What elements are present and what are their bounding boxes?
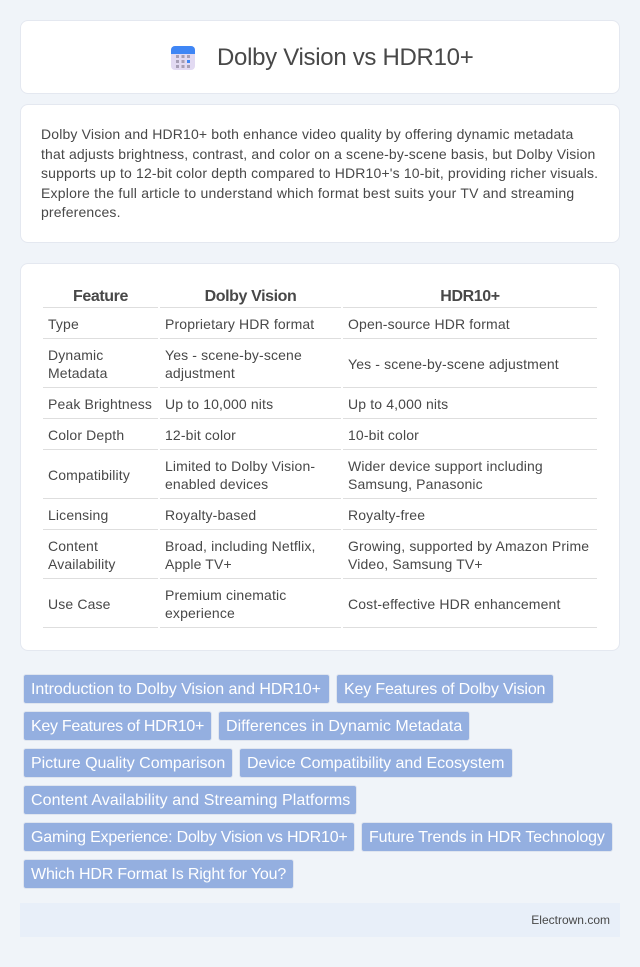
table rows: Yes - scene-by-scene adjustment bbox=[348, 356, 559, 372]
table rows: Availability bbox=[48, 556, 116, 572]
tag bbox=[23, 711, 212, 741]
title panel bbox=[20, 20, 620, 94]
intro text: that adjusts brightness, contrast, and color on a scene-by-scene basis, but Dolby Vision bbox=[41, 146, 595, 162]
tag: Key Features of Dolby Vision bbox=[344, 681, 545, 698]
table rows: Broad, including Netflix, bbox=[165, 538, 316, 554]
table rows: Royalty-free bbox=[348, 507, 425, 523]
tag: Picture Quality Comparison bbox=[31, 755, 225, 772]
table rows: Limited to Dolby Vision- bbox=[165, 458, 315, 474]
table header bbox=[73, 288, 500, 305]
tag: Content Availability and Streaming Platforms bbox=[31, 792, 350, 809]
table rows: Licensing bbox=[48, 507, 108, 523]
tag bbox=[23, 859, 294, 889]
intro text: Explore the full article to understand which format best suits your TV and streaming bbox=[41, 185, 574, 201]
topic tags bbox=[23, 674, 613, 889]
intro text: supports up to 12-bit color depth compared to HDR10+'s 10-bit, providing richer visuals. bbox=[41, 165, 598, 181]
table rows: Growing, supported by Amazon Prime bbox=[348, 538, 589, 554]
table rows bbox=[43, 307, 597, 628]
tag: Introduction to Dolby Vision and HDR10+ bbox=[31, 681, 321, 698]
table rows: Dynamic bbox=[48, 347, 103, 363]
tag bbox=[361, 822, 613, 852]
table rows: Proprietary HDR format bbox=[165, 316, 314, 332]
tag bbox=[23, 674, 330, 704]
icon: calendar grid bbox=[171, 46, 195, 70]
table rows: 10-bit color bbox=[348, 427, 419, 443]
table rows: Up to 10,000 nits bbox=[165, 396, 273, 412]
footer bbox=[20, 903, 620, 937]
table rows: Open-source HDR format bbox=[348, 316, 510, 332]
table rows: Royalty-based bbox=[165, 507, 256, 523]
table rows: Up to 4,000 nits bbox=[348, 396, 448, 412]
table rows: Apple TV+ bbox=[165, 556, 232, 572]
table header: HDR10+ bbox=[440, 288, 500, 305]
tag bbox=[336, 674, 554, 704]
tag: Gaming Experience: Dolby Vision vs HDR10+ bbox=[31, 829, 348, 846]
table rows: Color Depth bbox=[48, 427, 124, 443]
table rows: Cost-effective HDR enhancement bbox=[348, 596, 560, 612]
table rows: experience bbox=[165, 605, 235, 621]
table rows: Compatibility bbox=[48, 467, 130, 483]
tag: Key Features of HDR10+ bbox=[31, 718, 204, 735]
table rows: enabled devices bbox=[165, 476, 268, 492]
tag: Device Compatibility and Ecosystem bbox=[247, 755, 504, 772]
comparison table panel bbox=[20, 263, 620, 651]
tag: Differences in Dynamic Metadata bbox=[226, 718, 462, 735]
table rows: Wider device support including bbox=[348, 458, 543, 474]
table rows: Samsung, Panasonic bbox=[348, 476, 483, 492]
table header: Dolby Vision bbox=[205, 288, 296, 305]
tag bbox=[23, 822, 355, 852]
table rows: Peak Brightness bbox=[48, 396, 152, 412]
footer credit: Electrown.com bbox=[531, 913, 610, 927]
table rows: Video, Samsung TV+ bbox=[348, 556, 483, 572]
tag: Future Trends in HDR Technology bbox=[369, 829, 605, 846]
intro text: Dolby Vision and HDR10+ both enhance video quality by offering dynamic metadata bbox=[41, 126, 573, 142]
tag: Which HDR Format Is Right for You? bbox=[31, 866, 286, 883]
tag bbox=[239, 748, 513, 778]
tag bbox=[23, 785, 357, 815]
intro text bbox=[41, 126, 598, 220]
table rows: Type bbox=[48, 316, 79, 332]
table rows: Metadata bbox=[48, 365, 108, 381]
intro text panel bbox=[20, 104, 620, 243]
tag bbox=[23, 748, 233, 778]
table rows: Premium cinematic bbox=[165, 587, 286, 603]
table rows: Content bbox=[48, 538, 98, 554]
table header: Feature bbox=[73, 288, 128, 305]
table rows: 12-bit color bbox=[165, 427, 236, 443]
table rows: Use Case bbox=[48, 596, 111, 612]
table rows: adjustment bbox=[165, 365, 235, 381]
title: Dolby Vision vs HDR10+ bbox=[217, 44, 473, 71]
intro text: preferences. bbox=[41, 204, 121, 220]
tag bbox=[218, 711, 470, 741]
table rows: Yes - scene-by-scene bbox=[165, 347, 302, 363]
